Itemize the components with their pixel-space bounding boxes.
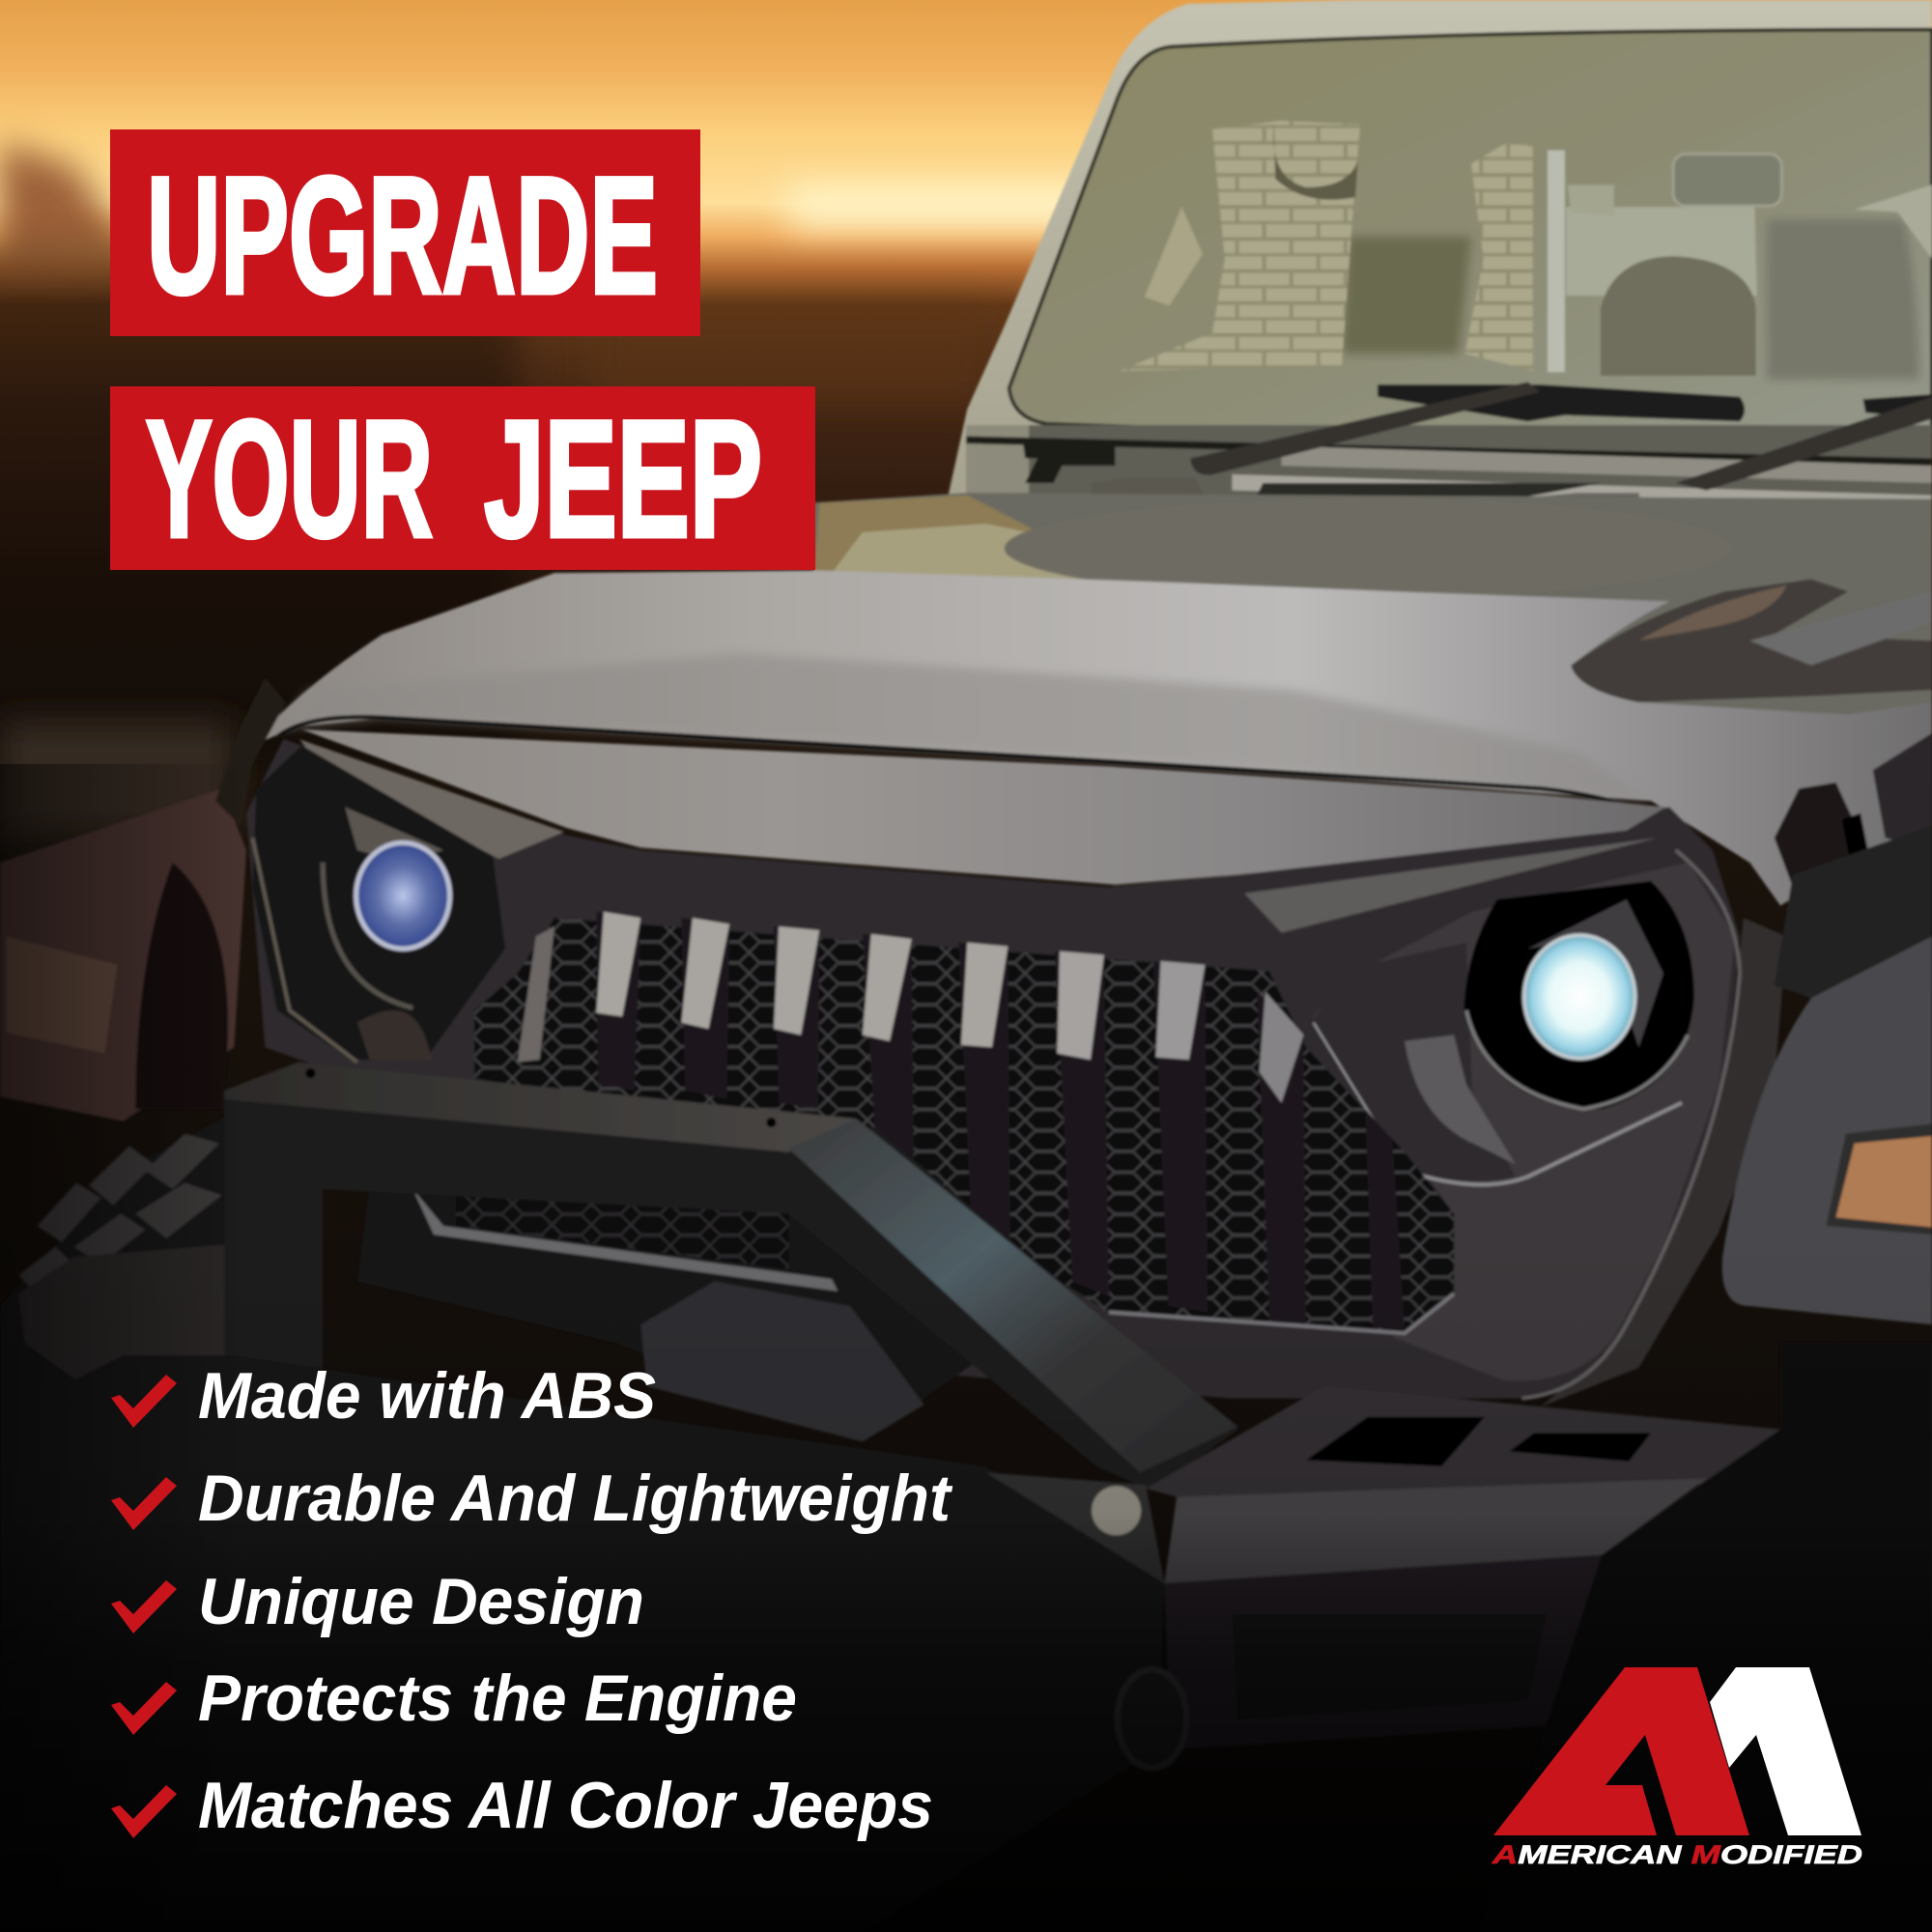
feature: Matches All Color Jeeps: Matches All Color Jeeps bbox=[198, 1769, 933, 1842]
hood bright surface bbox=[252, 571, 1932, 905]
left marker light bbox=[6, 936, 117, 1054]
grille shell bbox=[246, 739, 1740, 1399]
windshield frame bbox=[949, 0, 1932, 542]
winch box bbox=[640, 1282, 924, 1441]
windshield glass with seats bbox=[1009, 30, 1932, 431]
right grille cheek bbox=[1312, 863, 1735, 1380]
logo mark white stroke bbox=[1710, 1667, 1861, 1835]
hood latch left bbox=[215, 678, 286, 826]
heading: UPGRADE bbox=[110, 129, 700, 336]
grille top plate bbox=[301, 729, 1665, 885]
right marker light bbox=[1826, 1123, 1932, 1235]
wiper arm right bbox=[1676, 397, 1932, 491]
vignette fade bbox=[0, 764, 1932, 1932]
right fender bbox=[1722, 936, 1932, 1324]
hood latch right bbox=[1775, 782, 1897, 949]
left headlight bbox=[252, 746, 505, 1062]
stinger bar bbox=[224, 1062, 1238, 1491]
logo mark red A bbox=[1493, 1667, 1749, 1835]
tire tread bbox=[0, 1115, 246, 1932]
feature: Protects the Engine: Protects the Engine bbox=[198, 1662, 797, 1735]
feature list bbox=[111, 1359, 952, 1842]
right eyebrow bbox=[1244, 838, 1658, 933]
feature: Unique Design: Unique Design bbox=[198, 1565, 644, 1638]
left fender bbox=[0, 788, 246, 1122]
hood bump right bbox=[1538, 493, 1646, 527]
cowl and wipers bbox=[966, 382, 1932, 527]
hood rear reflection bbox=[813, 493, 1932, 739]
bumper side block bbox=[18, 1244, 228, 1405]
wiper arm left bbox=[1190, 382, 1540, 475]
wiper blade right bbox=[1863, 394, 1932, 419]
heading: YOUR JEEP bbox=[110, 386, 815, 572]
bumper bolt bbox=[1092, 1486, 1141, 1535]
wiper blade left bbox=[1378, 384, 1745, 421]
heading: UPGRADE: UPGRADE bbox=[147, 143, 658, 328]
front bumper bbox=[0, 1355, 1780, 1932]
heading: YOUR JEEP: JEEP bbox=[484, 386, 762, 572]
hinge bbox=[1023, 441, 1115, 483]
hood front gap line bbox=[277, 717, 1694, 838]
left eyebrow bbox=[299, 739, 564, 859]
logo wordmark: AMERICAN M ODIFIED bbox=[1492, 1840, 1862, 1869]
logo: American Modified bbox=[1492, 1667, 1862, 1869]
right headlight bbox=[1314, 881, 1694, 1184]
under-bar lower grille bbox=[357, 1182, 985, 1441]
hood bump left bbox=[1091, 478, 1208, 513]
hood dark reflections bbox=[1571, 579, 1932, 702]
feature: Durable And Lightweight: Durable And Lightweight bbox=[198, 1462, 952, 1535]
outer fender strip bbox=[1540, 918, 1786, 1407]
feature: Made with ABS: Made with ABS bbox=[198, 1359, 656, 1433]
grille mesh opening bbox=[474, 918, 1454, 1333]
grille slats bbox=[518, 912, 1405, 1328]
dark lower right chassis bbox=[1479, 1343, 1932, 1932]
heading: YOUR JEEP: YOUR bbox=[146, 386, 433, 572]
